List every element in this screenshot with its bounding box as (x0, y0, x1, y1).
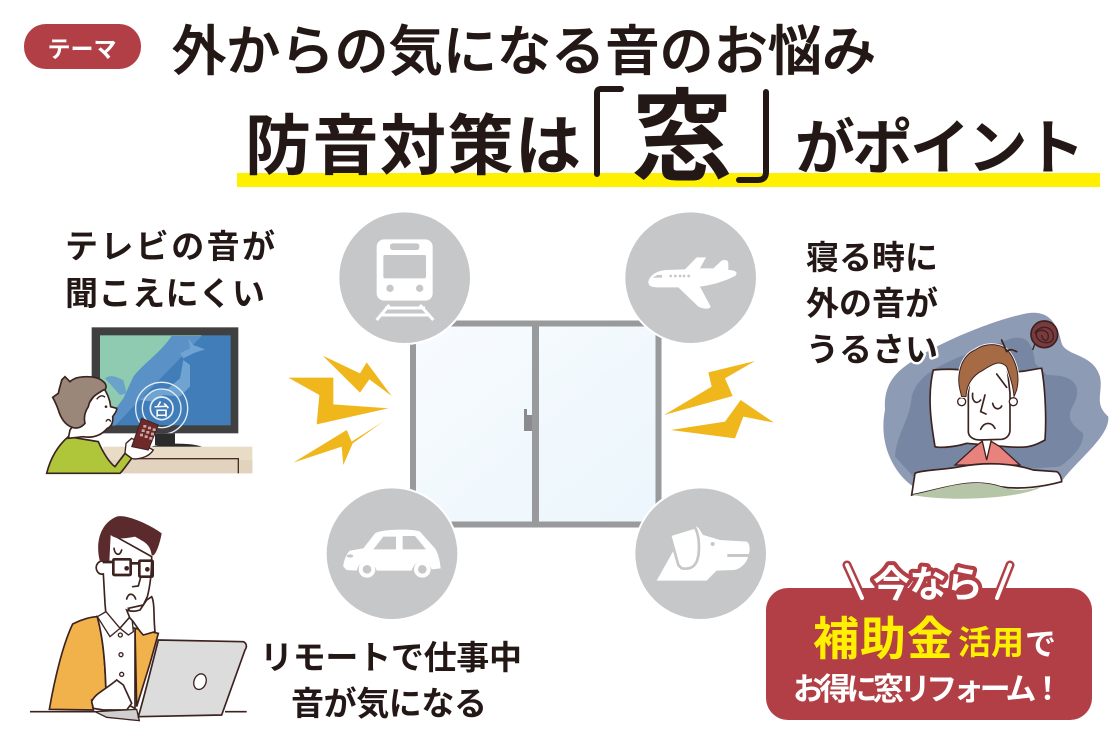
text: remote work: 音が気になる (291, 685, 487, 722)
title line 2: 窓 (632, 82, 732, 194)
text: sleeping: うるさい (806, 331, 938, 368)
illustration: person watching TV: 台 (154, 401, 170, 419)
illustration: sleeping person (883, 313, 1108, 499)
icons in reference zoom coordinates (325, 210, 768, 621)
title line 2: 防音対策は (245, 109, 581, 183)
icon: airplane (623, 210, 758, 345)
title line 1: 外からの気になる音のお悩み (172, 22, 876, 82)
text: TV: 聞こえにくい (65, 275, 265, 312)
illustration: person watching TV (47, 327, 252, 473)
icon: dog (633, 486, 768, 621)
text: sleeping: 寝る時に (806, 239, 938, 276)
icon: car (325, 486, 459, 621)
callout: subsidy: 活用 (958, 624, 1024, 661)
callout: subsidy: 今なら (873, 564, 983, 605)
text: TV: テレビの音が (65, 228, 275, 265)
sound bolts: right (664, 361, 774, 438)
title line 2: がポイント (795, 115, 1085, 182)
text: remote work: リモートで仕事中 (260, 639, 522, 676)
theme badge: テーマ (48, 36, 116, 62)
sound bolts: left (288, 356, 392, 465)
callout: subsidy: 補助金 (813, 613, 953, 665)
text: sleeping: 外の音が (806, 285, 938, 322)
callout: subsidy: で (1025, 627, 1056, 662)
text: TV (65, 228, 275, 312)
title line 2 (237, 82, 1100, 194)
callout: subsidy (766, 564, 1092, 720)
text: sleeping (806, 239, 938, 368)
window (413, 321, 658, 527)
callout: subsidy: お得に窓リフォーム！ (793, 672, 1063, 707)
theme badge (24, 24, 141, 69)
illustration: man at laptop (30, 516, 247, 721)
text: remote work (260, 639, 522, 722)
icon: train (337, 210, 472, 345)
